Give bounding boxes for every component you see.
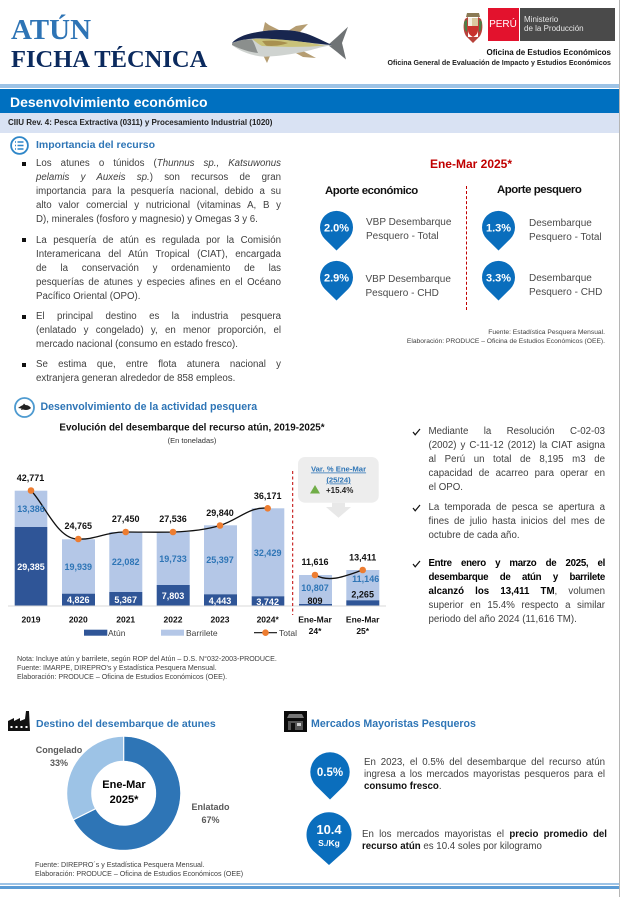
source: chart notes: Fuente: IMARPE, DIREPRO's y Estadística Pesquera Mensual.: [17, 664, 217, 672]
donut center label: 2025*: [110, 794, 138, 806]
text: mercados 0.5%: En 2023, el 0.5% del desembarque del recurso atún: [364, 756, 605, 768]
text block: importancia: alto valor comercial y nutricional (vitaminas A, B y: [36, 200, 281, 211]
office general name: Oficina General de Evaluación de Impacto y Estudios Económicos: [387, 59, 611, 67]
label: VBP Desembarque Pesquero - Total: VBP Desembarque: [366, 217, 451, 228]
heading: Aporte pesquero: Aporte pesquero: [497, 184, 581, 196]
text block: importancia: D), minerales (fosforo y magnesio) y Omegas 3 y 6.: [36, 214, 258, 225]
pin: 3.3% desembarque CHD: [482, 260, 515, 300]
bars: [15, 491, 379, 606]
text block: pesca notes: (2002) y C-11-12 (2012) la CIAT asigna: [428, 440, 605, 450]
icon: coat of arms: [464, 13, 482, 43]
source: chart notes: Elaboración: PRODUCE – Oficina de Estudios Económicos (OEE).: [17, 673, 227, 681]
label: VBP Desembarque Pesquero - Total: [366, 217, 451, 242]
text: mercados precio: recurso atún es 10.4 soles por kilogramo: [362, 841, 542, 852]
divider: [292, 471, 294, 615]
banner: Desenvolvimiento económico: [0, 88, 620, 113]
text block: pesca notes: al Perú un total de 8,195 m3 de: [428, 454, 605, 464]
barrilete values: 19,939: [65, 562, 92, 572]
atun values: 4,443: [209, 596, 231, 606]
source: chart notes: [17, 654, 277, 681]
pin: 0.5%: [310, 752, 350, 800]
source: aporte: [407, 328, 605, 345]
text block: pesca notes: Entre enero y marzo de 2025, el: [428, 558, 605, 568]
label: Enlatado: Enlatado: [191, 802, 230, 812]
total values: 42,771: [17, 473, 44, 483]
icon: list: [10, 136, 29, 155]
barrilete values: 10,807: [301, 583, 329, 593]
label: Desembarque Pesquero - CHD: Pesquero - CHD: [529, 286, 602, 298]
barrilete values: 32,429: [254, 548, 281, 558]
text block: importancia: pesquerías de atunes y especies afines en el Océano: [36, 276, 281, 288]
title: Atún: ATÚN: [11, 14, 91, 46]
source: donut: [35, 861, 243, 878]
pin: 2.9% VBP CHD: 2.9%: [324, 272, 349, 284]
text block: importancia: de la conservación y ordenamiento de las: [36, 262, 281, 274]
pin: 10.4 S/./Kg: 10.4: [316, 822, 342, 837]
donut center label: [102, 779, 146, 806]
icon: fish: [14, 397, 35, 418]
source: chart notes: Nota: Incluye atún y barrilete, según ROP del Atún – D.S. N°032-2003-PRODUCE.: [17, 654, 277, 662]
pin: 3.3% desembarque CHD: 3.3%: [486, 272, 511, 284]
axis labels: 25*: [356, 626, 370, 636]
callout: variation: (25/24): [326, 476, 351, 484]
axis labels: 2022: [164, 615, 183, 625]
heading: Desenvolvimiento de la actividad pesquera: Desenvolvimiento de la actividad pesquera: [40, 401, 257, 413]
text: mercados 0.5%: [364, 756, 605, 792]
source: aporte: Elaboración: PRODUCE – Oficina de Estudios Económicos (OEE).: [407, 338, 605, 345]
text block: importancia: Los atunes o túnidos (Thunnus sp., Katsuwonus: [36, 158, 281, 169]
logo: Perú red box: PERÚ: [489, 19, 517, 30]
label: Desembarque Pesquero - Total: [529, 218, 602, 243]
icon: market: [284, 711, 307, 732]
text block: pesca notes: periodo del año 2024 (11,616 TM).: [428, 614, 577, 624]
text block: importancia: Pacífico Oriental (OPO).: [36, 290, 140, 302]
text block: importancia: (enlatado y congelado) y, en menor proporción, el: [36, 325, 281, 336]
subheader: CIIU: [0, 113, 620, 133]
text block: pesca notes: fines de julio hasta inicios del mes de: [428, 516, 605, 526]
text block: pesca notes: [412, 426, 605, 624]
axis labels: Ene-Mar: [298, 615, 332, 625]
text block: pesca notes: alcanzó los 13,411 TM, volumen: [428, 586, 605, 596]
heading: Importancia del recurso: Importancia del recurso: [36, 139, 155, 151]
text block: pesca notes: desembarque de atún y barrilete: [428, 572, 605, 582]
callout: variation: Var. % Ene-Mar: [311, 464, 366, 474]
logo: ministry grey box: de la Producción: [524, 24, 584, 33]
text block: importancia: pelamis y Auxeis sp.) son recursos de gran: [36, 172, 281, 183]
label: VBP Desembarque Pesquero - CHD: Pesquero - CHD: [366, 288, 439, 298]
atun values: 4,826: [67, 595, 90, 605]
axis labels: 2021: [116, 615, 135, 625]
text: mercados 0.5%: ingresa a los mercados mayoristas pesqueros para el: [364, 769, 605, 780]
legend: Total: [279, 628, 297, 638]
icon: tuna fish illustration: [232, 22, 348, 63]
total values: 13,411: [349, 552, 376, 562]
atun values: 5,367: [114, 595, 137, 605]
callout: variation: +15.4%: [326, 486, 353, 495]
atun values: 2,265: [351, 590, 374, 600]
label: Desembarque Pesquero - CHD: [529, 272, 602, 298]
pin: 10.4 S/./Kg: S./Kg: [318, 838, 340, 848]
text block: importancia: [22, 158, 281, 384]
axis labels: 24*: [309, 626, 322, 636]
text: mercados precio: En los mercados mayoristas el precio promedio del: [362, 829, 607, 840]
total values: 11,616: [301, 557, 329, 567]
heading: Destino del desembarque de atunes: Destino del desembarque de atunes: [36, 718, 216, 730]
heading: Mercados Mayoristas Pesqueros: Mercados Mayoristas Pesqueros: [311, 718, 476, 730]
pin: 1.3% desembarque total: [482, 210, 515, 250]
chart subtitle: (En toneladas): [168, 436, 217, 445]
label: VBP Desembarque Pesquero - Total: Pesquero - Total: [366, 231, 439, 242]
barrilete values: 25,397: [206, 555, 234, 565]
logo: ministry grey box: [520, 8, 615, 41]
heading: Ene-Mar 2025: Ene-Mar 2025*: [430, 157, 512, 171]
text block: importancia: extranjera generan alrededor de 858 empleos.: [36, 373, 235, 384]
chart: donut destino: [36, 736, 230, 850]
text block: pesca notes: el OPO.: [428, 482, 463, 492]
text block: importancia: importancia para la pesquería nacional, debido a su: [36, 186, 281, 197]
pin: 1.3% desembarque total: 1.3%: [486, 222, 511, 234]
label: VBP Desembarque Pesquero - CHD: VBP Desembarque: [366, 274, 451, 284]
legend: [84, 628, 297, 638]
chart title: Evolución del desembarque del recurso atún, 2019-2025*: [59, 422, 325, 434]
total values: 24,765: [65, 521, 92, 531]
text block: pesca notes: superior en 15.4% respecto a similar: [428, 600, 605, 610]
heading: Aporte económico: Aporte económico: [325, 185, 418, 197]
label: Enlatado: 67%: [201, 815, 220, 825]
chart: desembarque bars and line: [8, 422, 386, 638]
atun values: 3,742: [256, 597, 279, 607]
atun values: [17, 562, 374, 607]
text block: pesca notes: octubre de cada año.: [428, 530, 520, 540]
pin: 2.9% VBP CHD: [320, 260, 353, 300]
label: Desembarque Pesquero - CHD: Desembarque: [529, 272, 592, 284]
source: aporte: Fuente: Estadística Pesquera Mensual.: [488, 328, 605, 336]
text: mercados precio: [362, 829, 607, 852]
pin: 0.5%: 0.5%: [317, 767, 343, 779]
atun values: 7,803: [162, 591, 184, 601]
axis labels: 2019: [22, 615, 41, 625]
source: donut: Fuente: DIREPRO´s y Estadística Pesquera Mensual.: [35, 861, 205, 869]
total values: 27,536: [159, 514, 187, 524]
label: Congelado: [36, 745, 82, 768]
axis labels: [22, 615, 380, 636]
barrilete values: 11,146: [352, 574, 379, 584]
label: Enlatado: [191, 802, 230, 825]
label: Congelado: Congelado: [36, 745, 82, 755]
total values: 36,171: [254, 491, 281, 501]
axis labels: Ene-Mar: [346, 615, 380, 625]
label: Desembarque Pesquero - Total: Desembarque: [529, 218, 592, 229]
total line: [28, 487, 366, 579]
text: mercados 0.5%: consumo fresco.: [364, 781, 442, 792]
total values: 29,840: [206, 508, 234, 518]
text block: importancia: mercado nacional (consumo en estado fresco).: [36, 339, 238, 350]
label: VBP Desembarque Pesquero - CHD: [366, 274, 451, 298]
pin: 2.0% VBP total: 2.0%: [324, 222, 349, 234]
axis labels: 2024*: [257, 615, 279, 625]
banner: Desenvolvimiento económico: Desenvolvimiento económico: [10, 94, 208, 110]
office name: Oficina de Estudios Económicos: [487, 48, 611, 57]
pin: 2.0% VBP total: [320, 210, 353, 250]
subheader: CIIU: CIIU Rev. 4: Pesca Extractiva (0311) y Procesamiento Industrial (1020): [8, 118, 272, 127]
icon: factory: [8, 711, 30, 731]
logo: ministry grey box: Ministerio: [524, 15, 558, 24]
text block: pesca notes: La temporada de pesca se apertura a: [428, 502, 605, 512]
atun values: 809: [307, 596, 323, 606]
label: Desembarque Pesquero - Total: Pesquero - Total: [529, 232, 602, 243]
label: Congelado: 33%: [50, 758, 68, 768]
barrilete values: 13,386: [17, 504, 45, 514]
title: Ficha técnica: FICHA TÉCNICA: [11, 46, 207, 73]
total values: 27,450: [112, 514, 139, 524]
axis labels: 2020: [69, 615, 88, 625]
barrilete values: 22,082: [112, 557, 139, 567]
legend: Barrilete: [186, 628, 218, 638]
text block: importancia: Se estima que, entre flota atunera nacional y: [36, 359, 281, 370]
source: donut: Elaboración: PRODUCE – Oficina de Estudios Económicos (OEE): [35, 870, 243, 878]
barrilete values: [17, 504, 379, 593]
callout: variation: [298, 457, 379, 518]
axis labels: 2023: [211, 615, 230, 625]
text block: pesca notes: Mediante la Resolución C-02-03: [428, 426, 605, 436]
text block: importancia: La pesquería de atún es regulada por la Comisión: [36, 234, 281, 246]
total values: [17, 473, 376, 567]
logo: Ministerio de la Producción: [464, 8, 615, 43]
text block: pesca notes: capacidad de acarreo para operar en: [428, 468, 605, 478]
pin: 10.4 S/./Kg: [306, 812, 352, 865]
donut center label: Ene-Mar: [102, 779, 146, 791]
logo: Perú red box: [488, 8, 518, 41]
legend: Atún: [108, 628, 126, 638]
barrilete values: 19,733: [159, 554, 187, 564]
text block: importancia: Interamericana del Atún Tropical (CIAT), encargada: [36, 248, 281, 260]
atun values: 29,385: [17, 562, 45, 572]
text block: importancia: El principal destino es la industria pesquera: [36, 311, 281, 322]
